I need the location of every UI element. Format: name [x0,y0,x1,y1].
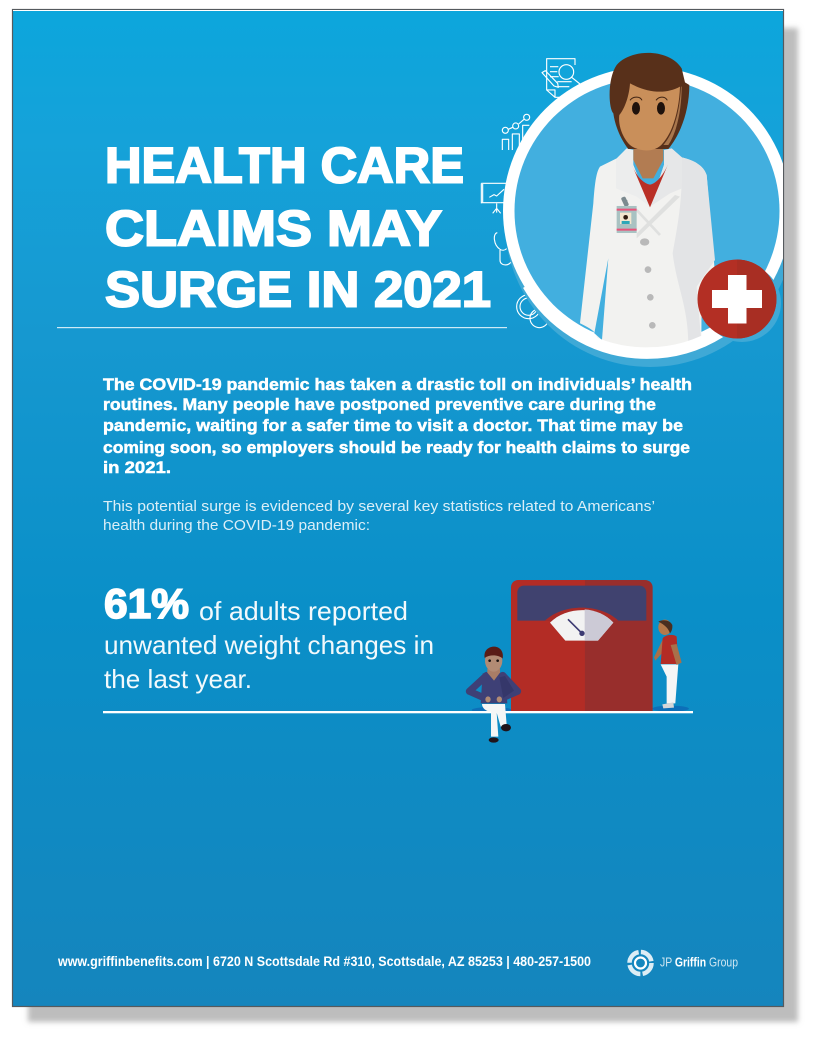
medical cross badge [698,260,781,342]
hair [610,53,689,149]
buttons [640,238,649,246]
statistic description: unwanted weight changes in [104,630,434,660]
ground shadows [472,707,512,713]
scale body [511,580,585,711]
face [619,83,680,150]
secondary paragraph [103,498,655,534]
icon: presentation board [481,183,506,213]
icon: document with magnifier [542,59,580,97]
intro paragraph: in 2021. [103,458,171,477]
torso [481,673,507,703]
arm gap [594,258,608,340]
statistic number: 61% [104,580,189,627]
intro paragraph: pandemic, waiting for a safer time to visit a doctor. That time may be [103,416,683,435]
company logo [630,952,738,974]
footer contact line: www.griffinbenefits.com | 6720 N Scottsdale Rd #310, Scottsdale, AZ 85253 | 480-257-1500 [57,954,591,969]
neck [487,669,500,681]
neck [633,149,664,178]
medallion inner disc [514,78,780,344]
white cross [712,275,762,324]
dial face [550,610,613,641]
face shade [663,87,682,145]
title [105,138,491,318]
pocket pen stroke [637,195,680,238]
doctor portrait medallion [503,53,795,367]
collars [624,148,638,176]
shirt [632,164,668,207]
standing man [654,620,682,708]
medallion ring lower arc [523,286,724,359]
title: CLAIMS MAY [105,200,442,256]
id badge [617,196,637,233]
medallion ring shadow [506,243,783,367]
statistic description: of adults reported [199,596,408,626]
sitting man [469,647,518,743]
statistic description [104,596,434,694]
head [485,650,502,672]
title: HEALTH CARE [105,138,464,194]
secondary paragraph: This potential surge is evidenced by several key statistics related to Americans’ [103,498,655,515]
icon: coins and chart [517,295,549,328]
icon: growth chart [502,114,530,150]
scale display panel [517,586,646,621]
secondary paragraph: health during the COVID-19 pandemic: [103,517,370,534]
medallion ring [503,67,791,355]
icon: stethoscope [494,233,512,265]
eyes [632,102,640,115]
scale illustration [472,580,689,713]
dial needle [568,619,582,633]
title: SURGE IN 2021 [105,262,491,318]
title rule [57,327,507,328]
statistic description: the last year. [104,664,252,694]
coat right shading [673,157,715,345]
intro paragraph: The COVID-19 pandemic has taken a drastic toll on individuals’ health [103,375,692,394]
statistic: 61 percent of adults [104,580,434,694]
intro paragraph: routines. Many people have postponed preventive care during the [103,395,656,414]
icon column: health and benefits line icons [481,59,580,328]
logo mark [630,952,652,974]
legs [482,704,507,737]
doctor coat [580,148,715,348]
doctor head [610,53,689,178]
arms [469,675,518,699]
coat body [580,148,715,348]
hands [485,696,491,702]
intro paragraph [103,375,692,477]
stat baseline rule [103,711,693,713]
intro paragraph: coming soon, so employers should be ready for health claims to surge [103,438,690,457]
dial housing [545,608,618,621]
logo wordmark: JP Griffin Group [660,954,738,970]
